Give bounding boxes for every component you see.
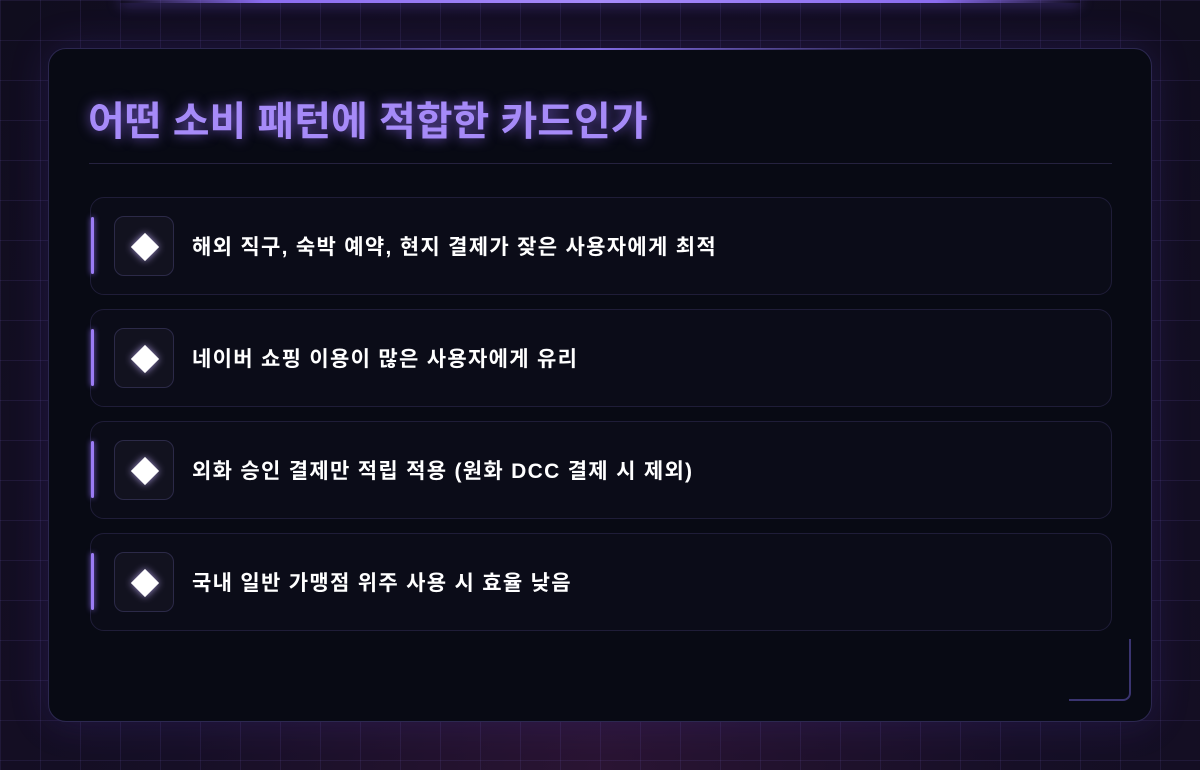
icon: diamond	[114, 328, 174, 388]
icon: diamond	[114, 552, 174, 612]
text: item 3: 외화 승인 결제만 적립 적용 (원화 DCC 결제 시 제외)	[192, 460, 693, 483]
item 3	[90, 421, 1112, 519]
text: item 4: 국내 일반 가맹점 위주 사용 시 효율 낮음	[192, 572, 572, 595]
text: item 1: 해외 직구, 숙박 예약, 현지 결제가 잦은 사용자에게 최적	[192, 236, 717, 259]
icon: diamond	[114, 216, 174, 276]
item 1	[90, 197, 1112, 295]
icon: diamond	[114, 440, 174, 500]
title: 어떤 소비 패턴에 적합한 카드인가	[88, 100, 648, 144]
item 4	[90, 533, 1112, 631]
text: item 2: 네이버 쇼핑 이용이 많은 사용자에게 유리	[192, 348, 578, 371]
corner bracket	[1069, 639, 1131, 701]
item 2	[90, 309, 1112, 407]
